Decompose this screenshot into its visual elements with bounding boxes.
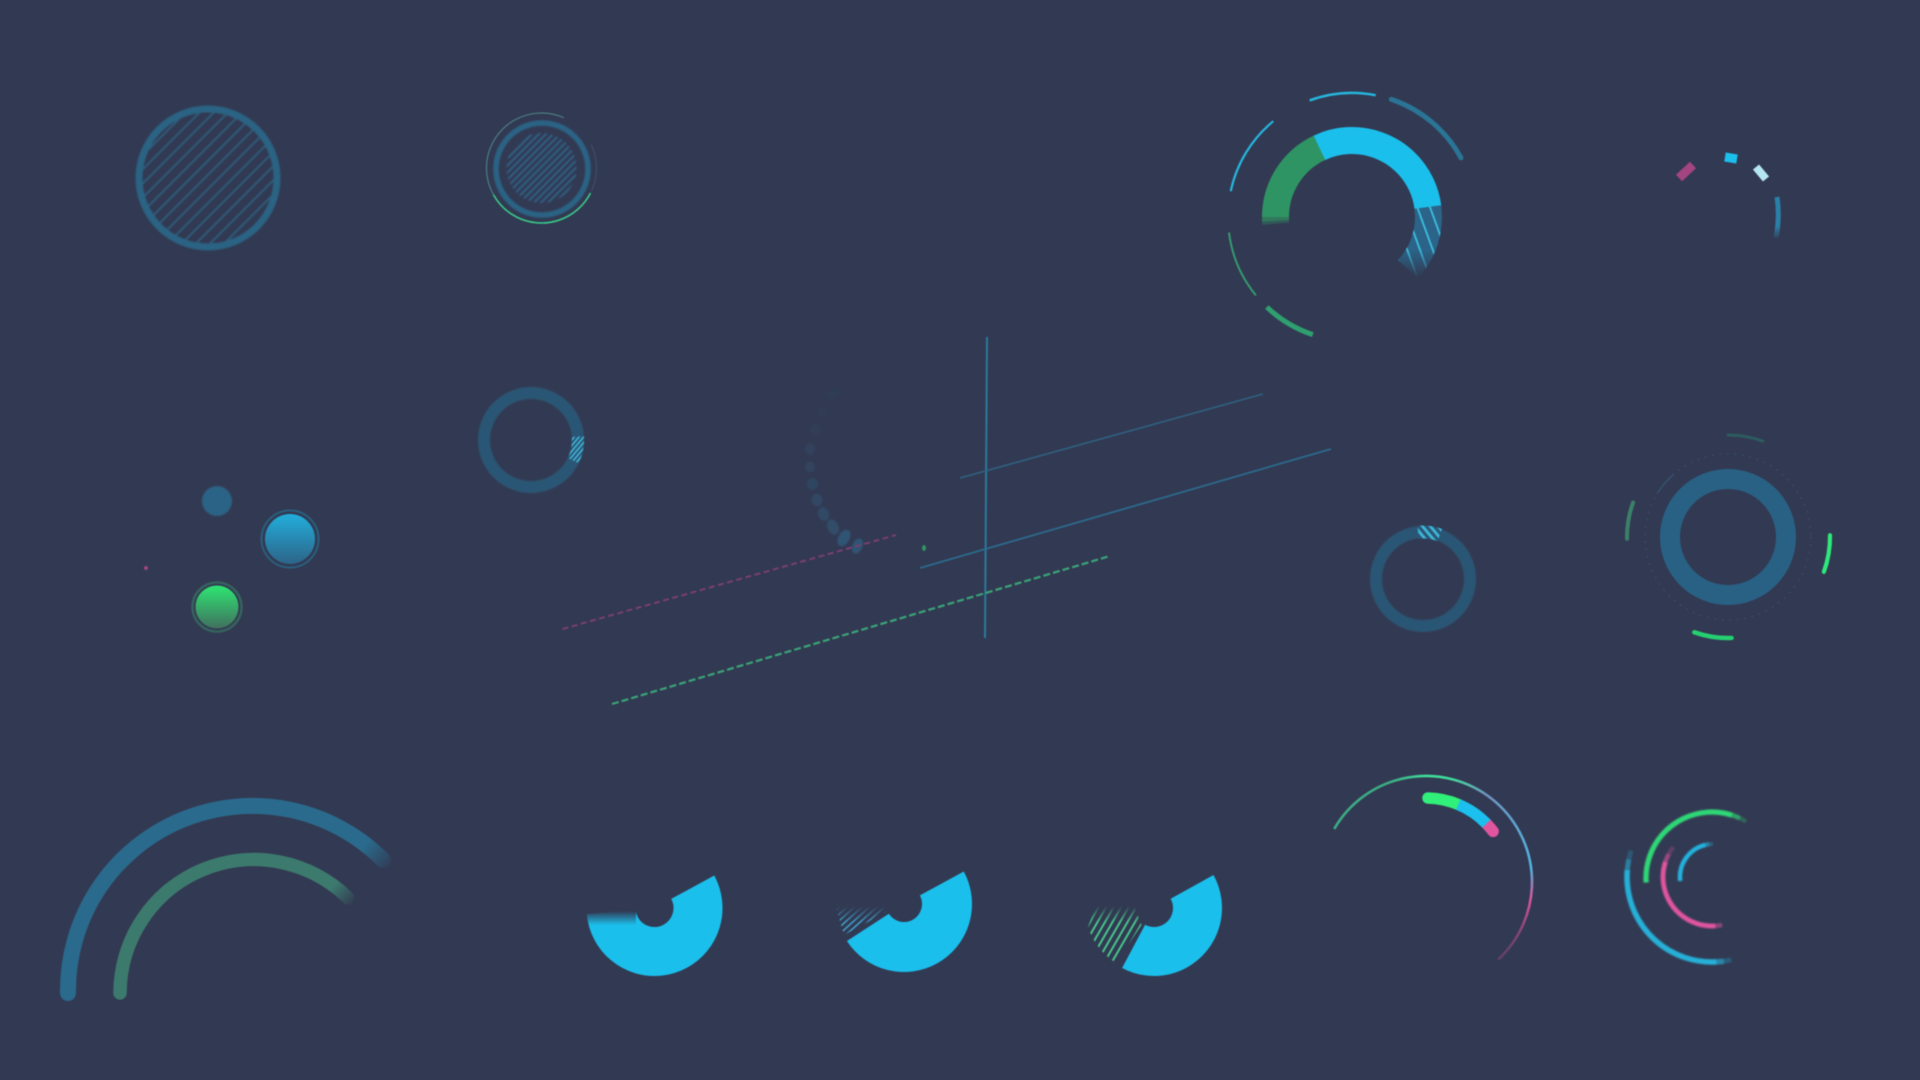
segmented donut with outer arcs	[1228, 91, 1464, 338]
pale block	[1756, 167, 1766, 179]
green ball	[192, 582, 242, 632]
green dashed line	[612, 556, 1110, 704]
ring with hatched notch, right	[1376, 532, 1470, 626]
small teal dot	[202, 486, 232, 516]
pink arc	[1646, 811, 1778, 943]
blue ball	[262, 510, 318, 568]
cyan sector	[1095, 849, 1213, 967]
outer green arcs	[1614, 423, 1842, 651]
inner green arc	[120, 859, 348, 993]
lower diagonal line	[920, 449, 1331, 568]
hatched sector	[836, 908, 886, 934]
green hatched sector	[1088, 905, 1142, 963]
pink dot	[144, 566, 148, 570]
fan gauge 2	[835, 846, 962, 962]
upper diagonal line	[960, 394, 1263, 478]
small green marker	[922, 545, 926, 551]
green arc	[1624, 790, 1800, 966]
fading dotted arc	[805, 388, 865, 555]
pink dashed line	[562, 535, 896, 629]
spiral arcs	[1610, 775, 1814, 979]
cyan sector	[846, 846, 962, 962]
concentric arcs, bottom left	[68, 806, 383, 993]
fan gauge 3	[1088, 849, 1213, 967]
outer blue arc	[68, 806, 383, 993]
ring with hatched notch, left	[484, 393, 578, 487]
dotted ring	[1645, 454, 1811, 620]
donut: hatched segment	[1408, 207, 1428, 269]
outer cyan arc	[1610, 775, 1814, 979]
pink block	[1679, 165, 1693, 178]
outer arcs	[1178, 43, 1526, 391]
thick ring with dotted ring and green arcs	[1614, 423, 1842, 651]
teal arc piece	[1776, 197, 1778, 238]
thin gradient arc	[1334, 776, 1532, 960]
hatched circle, large	[139, 109, 277, 247]
multicolour gauge arc	[1334, 776, 1532, 960]
cyan block	[1725, 157, 1737, 159]
hatched circle with thin outer ring	[467, 93, 616, 243]
small cyan arc	[1673, 837, 1753, 917]
thick tri-colour arc	[1428, 798, 1493, 831]
donut: cyan segment	[1250, 115, 1454, 319]
crossing lines	[562, 337, 1331, 704]
vertical line	[985, 337, 987, 638]
main ring	[1670, 479, 1786, 595]
donut: green segment	[1269, 134, 1435, 300]
fan gauge 1	[596, 849, 713, 967]
broken ring of small blocks	[1679, 157, 1778, 238]
